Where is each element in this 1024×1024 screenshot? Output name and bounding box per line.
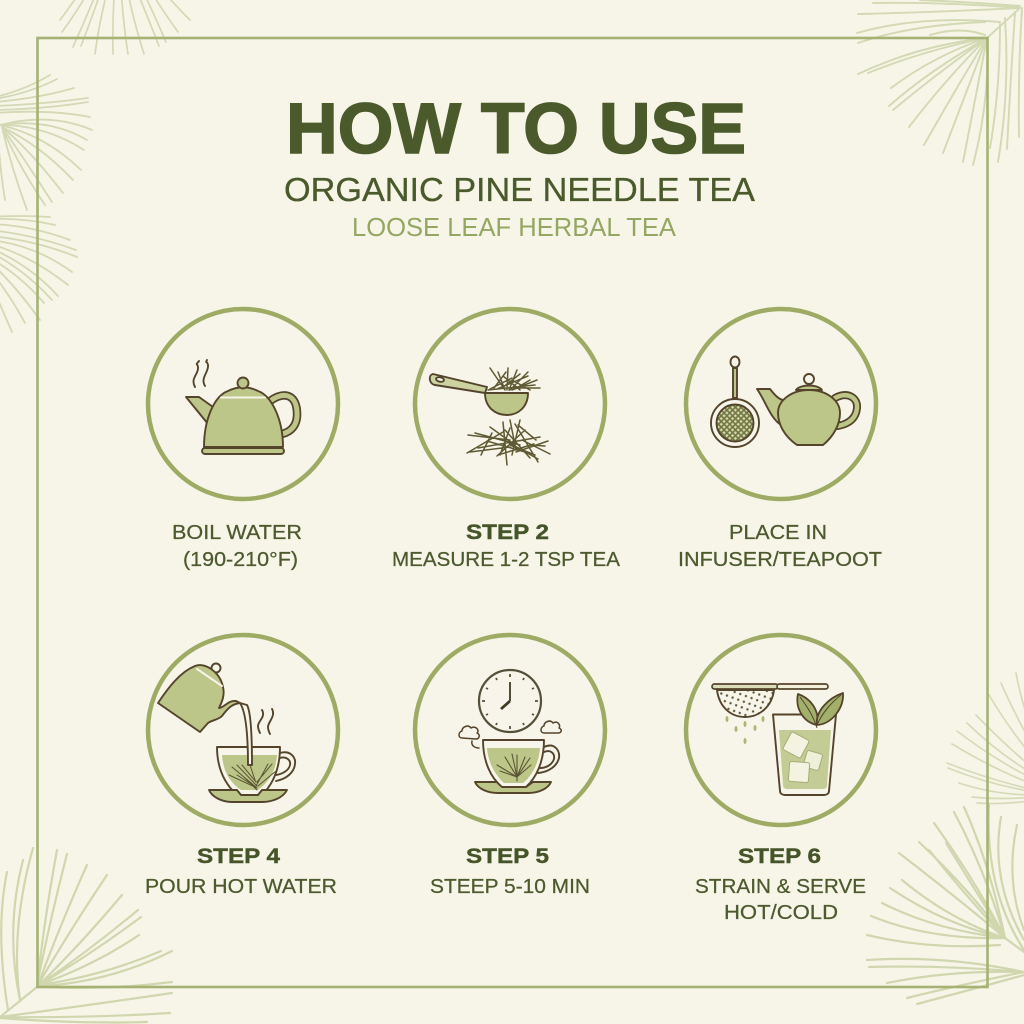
pine needles: top centre <box>60 0 190 54</box>
pine needles: right side <box>947 673 1024 804</box>
tagline: LOOSE LEAF HERBAL TEA <box>352 212 677 242</box>
label: step 1 <box>172 522 302 571</box>
panel: step 2 measure <box>392 309 621 571</box>
label: step 5: STEEP 5-10 MIN <box>430 876 590 898</box>
label: step 2 <box>392 521 621 571</box>
panel: step 4 pour <box>145 635 338 898</box>
panel: step 1 boil water <box>148 309 338 571</box>
label: step 6: STEP 6 <box>738 845 821 868</box>
pine needles: left side <box>0 75 92 332</box>
label: step 4 <box>145 845 337 898</box>
icon: iced tea glass with leaves <box>773 693 843 795</box>
pine needles: top right <box>857 0 1022 165</box>
icon: tea cup with needles <box>475 740 559 793</box>
pine needles: bottom left <box>0 848 172 1022</box>
subtitle: ORGANIC PINE NEEDLE TEA <box>284 171 755 208</box>
label: step 3: PLACE IN <box>729 522 827 544</box>
ring: step 5 <box>415 635 605 825</box>
pine needles: bottom right <box>867 805 1024 1004</box>
ring: step 1 <box>148 309 338 499</box>
label: step 5: STEP 5 <box>466 845 549 868</box>
label: step 4: STEP 4 <box>197 845 280 868</box>
panel: step 5 steep <box>415 635 605 898</box>
icon: scoop and pine needles <box>430 368 550 465</box>
icon: kettle with steam <box>186 360 297 454</box>
ring: step 4 <box>148 635 338 825</box>
panel: step 6 strain and serve <box>686 635 876 924</box>
label: step 3: INFUSER/TEAPOOT <box>678 549 882 571</box>
label: step 4: POUR HOT WATER <box>145 876 337 898</box>
icon: teapot <box>757 374 857 445</box>
ring: step 6 <box>686 635 876 825</box>
label: step 6: HOT/COLD <box>724 902 838 924</box>
icon: sieve with drops <box>712 684 828 744</box>
label: step 1: (190-210°F) <box>183 549 298 571</box>
ring: step 3 <box>686 309 876 499</box>
label: step 6 <box>695 845 866 924</box>
label: step 3 <box>678 522 882 571</box>
icon: strainer <box>711 356 759 447</box>
title: HOW TO USE <box>286 90 746 169</box>
label: step 1: BOIL WATER <box>172 522 302 544</box>
panel: step 3 infuser <box>678 309 882 571</box>
label: step 2: MEASURE 1-2 TSP TEA <box>392 549 621 571</box>
ring: step 2 <box>415 309 605 499</box>
label: step 2: STEP 2 <box>466 521 549 544</box>
label: step 6: STRAIN & SERVE <box>695 876 866 898</box>
label: step 5 <box>430 845 590 898</box>
icon: clock <box>479 670 541 732</box>
icon: pouring teapot <box>158 664 295 802</box>
icon: steam clouds <box>459 721 561 748</box>
